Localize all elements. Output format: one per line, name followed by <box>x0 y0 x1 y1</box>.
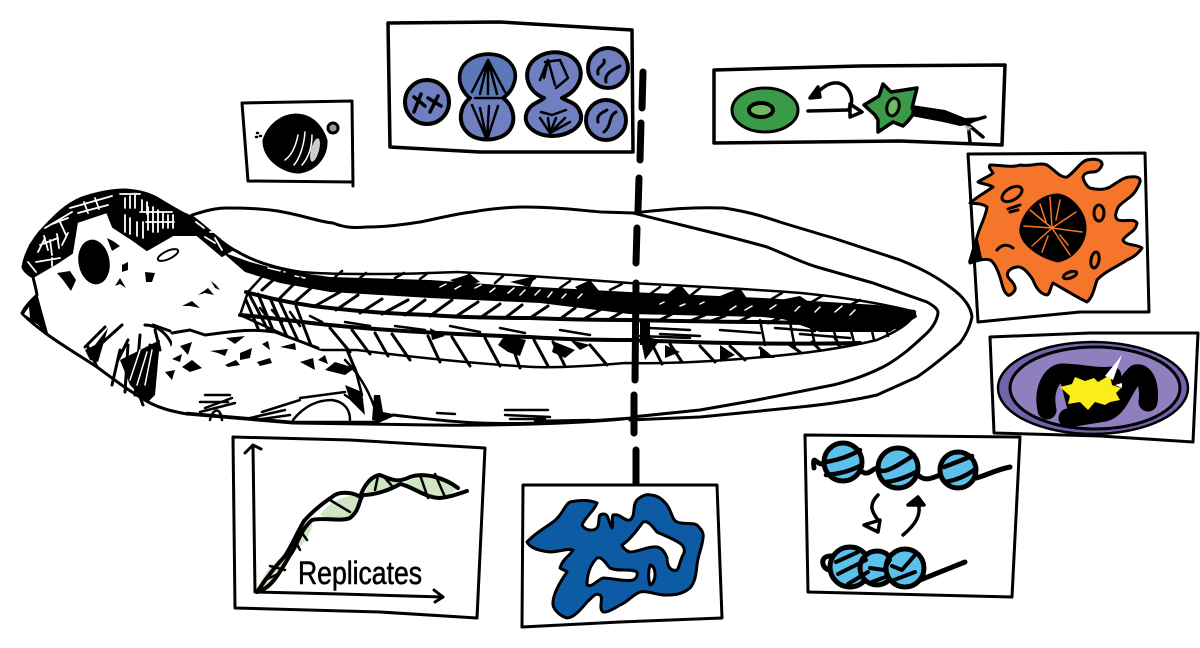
dashed section line <box>634 72 643 485</box>
segment dividers <box>246 272 840 368</box>
icon: mitochondrion outer membrane <box>998 342 1188 434</box>
icon: pyknotic nucleus <box>263 114 327 173</box>
icon: stem cell <box>732 88 798 132</box>
icon: orange macrophage <box>970 159 1142 302</box>
dorsal head pigment <box>23 191 232 277</box>
panel: mitosis <box>388 22 633 152</box>
body and head outline <box>22 190 632 425</box>
icon: anaphase cell <box>460 54 515 140</box>
snout <box>22 295 48 335</box>
tail fin outlines <box>192 207 972 420</box>
panel: replicates graph <box>233 437 485 618</box>
gill region <box>85 325 378 422</box>
panel: condensed dark cell <box>242 101 353 186</box>
panel: mitochondrion <box>990 333 1198 442</box>
icon: yellow burst <box>1060 375 1121 410</box>
icon: open chromatin <box>814 443 1010 488</box>
eye <box>75 238 113 286</box>
icon: mitochondrion matrix <box>1010 347 1180 429</box>
icon: telophase cell <box>526 52 581 136</box>
panel: macrophage <box>968 153 1149 322</box>
icon: apoptotic fragments <box>328 123 338 133</box>
strip pigment blots <box>430 318 912 362</box>
tadpole illustration <box>22 190 972 425</box>
chart axes <box>245 445 443 602</box>
yolk speckles <box>165 336 355 380</box>
nostril <box>156 247 180 263</box>
panel: blue aggregate <box>522 485 722 627</box>
icon: cristae <box>1046 373 1148 418</box>
black dorsal band <box>222 252 917 330</box>
icon: metaphase cell <box>405 80 449 124</box>
head speckles <box>57 238 220 308</box>
icon: vacuoles <box>997 183 1104 280</box>
icon: DNA helix curve <box>257 474 467 592</box>
arrow: cycle between cell states <box>808 83 862 117</box>
chart label: Replicates <box>298 555 422 591</box>
icon: daughter cells <box>586 48 628 140</box>
chevron row markings <box>260 308 888 348</box>
top row dividers and blots <box>335 271 860 305</box>
head hatching <box>28 194 222 272</box>
myotome strip <box>222 252 917 368</box>
gut and belly details <box>187 360 590 422</box>
strip outline <box>240 268 915 367</box>
band white flecks <box>268 268 855 315</box>
icon: macrophage nucleus <box>1020 194 1086 262</box>
arrow: compaction <box>864 495 924 535</box>
icon: blue blob <box>527 495 703 618</box>
longitudinal lines <box>240 292 880 344</box>
icon: neuron <box>864 84 985 142</box>
panel: nucleosomes <box>805 435 1020 597</box>
panel: differentiation <box>714 65 1005 145</box>
icon: compact chromatin <box>823 547 965 587</box>
